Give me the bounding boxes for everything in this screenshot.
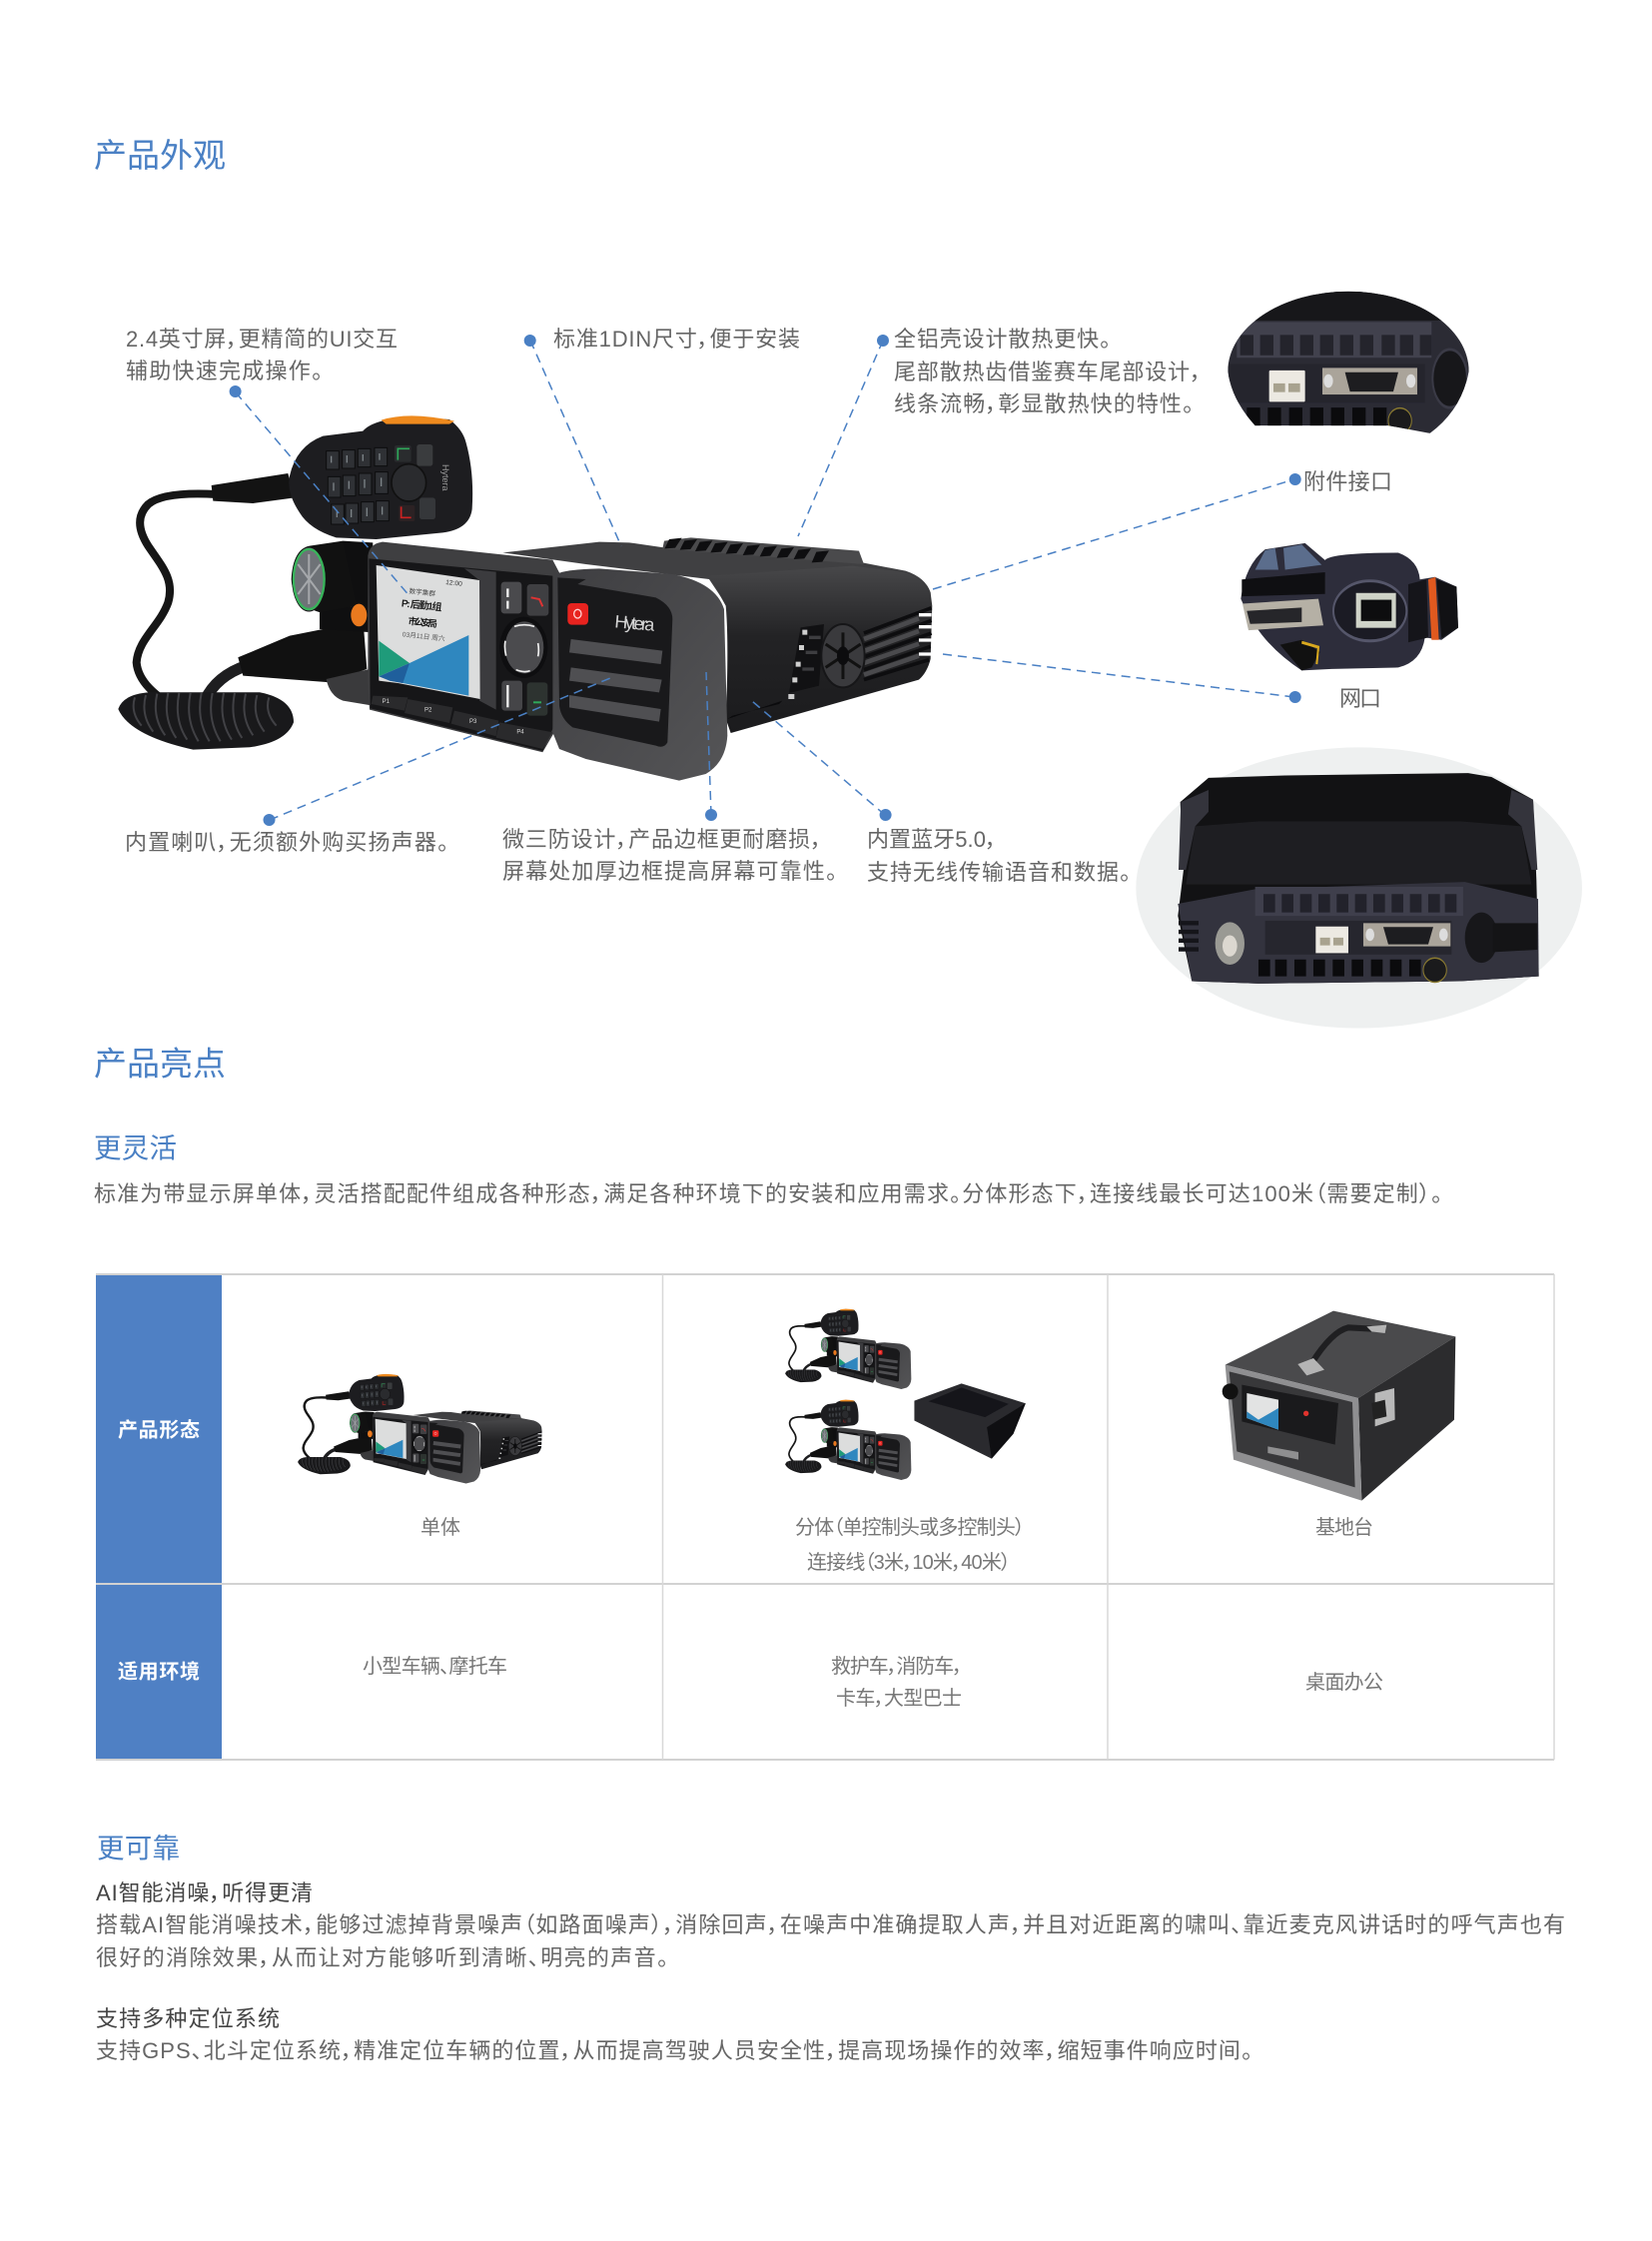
illustration: main radio with microphone: P3 (469, 719, 477, 725)
subheading: more flexible: 更灵活 (94, 1132, 177, 1163)
row header: environment: 适用环境 (118, 1660, 200, 1684)
callout: aluminium housing: 全铝壳设计散热更快。 (894, 327, 1111, 352)
callout: aluminium housing: 尾部散热齿借鉴赛车尾部设计， (894, 360, 1202, 384)
illustration: main radio with microphone: Hytera (440, 464, 450, 491)
callout: protection (502, 672, 837, 884)
callout: screen: 辅助快速完成操作。 (126, 359, 323, 383)
text block: positioning systems (96, 2006, 1252, 2063)
text block: AI noise cancelling: 很好的消除效果，从而让对方能够听到清晰、明亮的声音。 (96, 1945, 668, 1970)
heading: product highlights: 产品亮点 (94, 1045, 226, 1083)
callout: accessory port: 附件接口 (1303, 469, 1392, 494)
illustration: main radio with microphone: 市公安局 (408, 615, 437, 629)
caption: split: 分体（单控制头或多控制头） (795, 1516, 1025, 1539)
callout: aluminium housing: 线条流畅，彰显散热快的特性。 (894, 391, 1194, 416)
illustration: main radio with microphone: P: 后勤1组 (401, 596, 442, 614)
row header: product form: 产品形态 (118, 1418, 200, 1442)
environment: large vehicles: 卡车，大型巴士 (836, 1687, 962, 1710)
subheading: more reliable: 更可靠 (97, 1833, 180, 1864)
inset: rear view on gray ellipse (1136, 747, 1582, 1029)
callout: 1DIN size: 标准1DIN尺寸，便于安装 (553, 327, 800, 352)
environment: large vehicles: 救护车，消防车， (831, 1655, 963, 1678)
panel: product appearance diagram (118, 289, 1582, 1029)
illustration: main radio with microphone (118, 415, 932, 781)
environment: large vehicles (831, 1655, 963, 1710)
callout: network port (943, 654, 1381, 711)
callout: network port: 网口 (1339, 686, 1381, 711)
illustration: main radio with microphone: 03月11日 周六 (402, 629, 445, 643)
callout: 1DIN size (524, 327, 800, 546)
callout: screen (126, 327, 411, 597)
caption: base station: 基地台 (1315, 1516, 1373, 1539)
callout: protection: 屏幕处加厚边框提高屏幕可靠性。 (502, 859, 837, 884)
inset: accessory port close-up (1226, 289, 1471, 439)
callout: speaker (125, 678, 610, 855)
text block: flexible description: 标准为带显示屏单体，灵活搭配配件组成各种形态，满足各种环境下的安装和应用需求。分体形态下，连接线最长可达100米（需要定制）。 (94, 1181, 1442, 1206)
callout: accessory port (933, 469, 1392, 589)
callout: protection: 微三防设计，产品边框更耐磨损， (502, 827, 822, 852)
callout: screen: 2.4英寸屏，更精简的UI交互 (126, 327, 398, 352)
illustration: main radio with microphone: Hytera (614, 611, 655, 635)
illustration: main radio with microphone: P4 (516, 730, 524, 736)
product thumbnail: split type (785, 1309, 1026, 1480)
product thumbnail: single unit (298, 1374, 542, 1483)
inset: network port close-up (1240, 543, 1458, 670)
text block: AI noise cancelling: AI智能消噪，听得更清 (96, 1880, 313, 1905)
text block: positioning systems: 支持多种定位系统 (96, 2006, 280, 2031)
product thumbnail: base station (1223, 1311, 1455, 1501)
callout: speaker: 内置喇叭，无须额外购买扬声器。 (125, 830, 448, 855)
table: product forms and environments (96, 1274, 1554, 1760)
illustration: main radio with microphone: 数字集群 (409, 586, 436, 598)
title: product appearance: 产品外观 (94, 137, 226, 174)
environment: small vehicles: 小型车辆、摩托车 (363, 1655, 507, 1678)
text block: AI noise cancelling (96, 1880, 1565, 1970)
illustration: main radio with microphone: P1 (383, 699, 391, 705)
text block: positioning systems: 支持GPS、北斗定位系统，精准定位车辆的位置，从而提高驾驶人员安全性，提高现场操作的效率，缩短事件响应时间。 (96, 2038, 1252, 2063)
caption: split: 连接线（3米，10米，40米） (807, 1551, 1011, 1574)
callout: bluetooth: 内置蓝牙5.0， (867, 827, 997, 852)
caption: split (795, 1516, 1025, 1574)
illustration: main radio with microphone: 12:00 (445, 579, 462, 588)
caption: single: 单体 (420, 1516, 460, 1539)
environment: desktop office: 桌面办公 (1305, 1671, 1383, 1694)
illustration: main radio with microphone: P2 (424, 708, 432, 714)
text block: AI noise cancelling: 搭载AI智能消噪技术，能够过滤掉背景噪声（如路面噪声），消除回声，在噪声中准确提取人声，并且对近距离的啸叫、靠近麦克风讲话时的呼气声也有 (96, 1912, 1565, 1937)
callout: aluminium housing (798, 327, 1202, 536)
callout: bluetooth (752, 701, 1131, 885)
callout: bluetooth: 支持无线传输语音和数据。 (867, 860, 1131, 885)
